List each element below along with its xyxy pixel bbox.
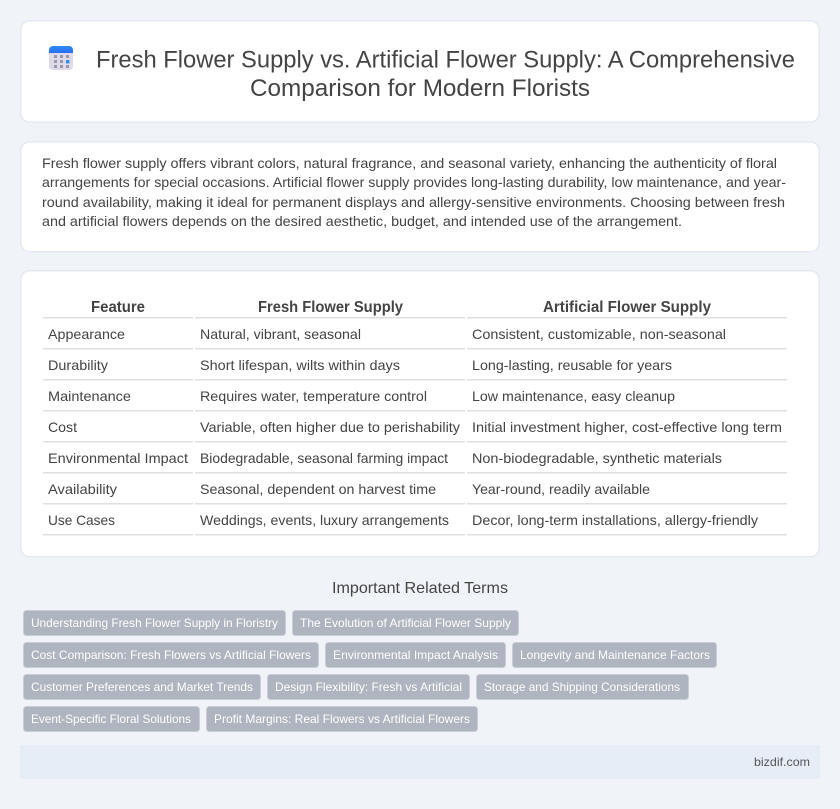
footer: bizdif.com: [754, 755, 810, 769]
heading: related terms: Important Related Terms: [332, 580, 508, 597]
tag: [24, 674, 260, 700]
table row: maintenance: Low maintenance, easy cleanup: [472, 388, 675, 404]
table row: durability: Short lifespan, wilts within days: [200, 357, 400, 373]
footer: [20, 745, 820, 779]
introduction text: [42, 155, 786, 229]
title text: Fresh Flower Supply vs. Artificial Flower Supply: A Comprehensive: [96, 46, 795, 74]
table row: appearance: [48, 326, 726, 342]
table row: maintenance: Requires water, temperature control: [200, 388, 427, 404]
table row: environmental impact: [48, 450, 722, 466]
introduction text: round availability, making it ideal for permanent displays and allergy-sensitive environments. Choosing between fresh: [42, 194, 785, 210]
table row: cost: Initial investment higher, cost-effective long term: [472, 419, 782, 435]
table row: availability: Seasonal, dependent on harvest time: [200, 481, 436, 497]
table row: durability: [48, 357, 672, 373]
tag: Design Flexibility: Fresh vs Artificial: [275, 680, 462, 694]
table row: durability: Durability: [48, 357, 108, 373]
related terms tags: [24, 610, 716, 732]
tag: [206, 706, 478, 732]
table row: availability: [48, 481, 650, 497]
table row: use cases: [48, 512, 758, 528]
panel: introduction: [21, 142, 819, 252]
table row: maintenance: [48, 388, 675, 404]
panel: title: [21, 21, 819, 122]
table row: availability: Availability: [48, 481, 117, 497]
table row: use cases: Decor, long-term installations, allergy-friendly: [472, 512, 758, 528]
tag: [326, 642, 506, 668]
tag: [476, 674, 688, 700]
table row: cost: [48, 419, 782, 435]
table row: maintenance: Maintenance: [48, 388, 131, 404]
tag: The Evolution of Artificial Flower Supply: [300, 616, 511, 630]
panel: comparison table: [21, 271, 819, 557]
tag: Cost Comparison: Fresh Flowers vs Artificial Flowers: [31, 648, 311, 662]
table header: Artificial Flower Supply: [543, 299, 711, 316]
tag: Customer Preferences and Market Trends: [31, 680, 253, 694]
tag: Storage and Shipping Considerations: [484, 680, 680, 694]
tag: [24, 610, 286, 636]
table row: environmental impact: Environmental Impact: [48, 450, 188, 466]
tag: Environmental Impact Analysis: [333, 648, 498, 662]
icon: calendar: [49, 46, 73, 70]
table row: appearance: Natural, vibrant, seasonal: [200, 326, 361, 342]
introduction text: Fresh flower supply offers vibrant colors, natural fragrance, and seasonal variety, enhancing the authenticity of floral: [42, 155, 777, 171]
title text: Comparison for Modern Florists: [250, 75, 590, 102]
tag: Longevity and Maintenance Factors: [520, 648, 710, 662]
table header: Fresh Flower Supply: [258, 299, 403, 316]
tag: [24, 706, 200, 732]
table row: environmental impact: Non-biodegradable, synthetic materials: [472, 450, 722, 466]
tag: Understanding Fresh Flower Supply in Floristry: [31, 616, 278, 630]
title text: [96, 46, 795, 102]
tag: [292, 610, 518, 636]
table header: [91, 299, 711, 316]
table row: cost: Cost: [48, 419, 77, 435]
table row: appearance: Consistent, customizable, non-seasonal: [472, 326, 726, 342]
table row: appearance: Appearance: [48, 326, 125, 342]
tag: Profit Margins: Real Flowers vs Artificial Flowers: [214, 712, 470, 726]
table row: availability: Year-round, readily available: [472, 481, 650, 497]
table row: use cases: Weddings, events, luxury arrangements: [200, 512, 449, 528]
tag: Event-Specific Floral Solutions: [31, 712, 191, 726]
tag: [268, 674, 470, 700]
tag: [512, 642, 716, 668]
tag: [24, 642, 318, 668]
table row: cost: Variable, often higher due to perishability: [200, 419, 460, 435]
table row: environmental impact: Biodegradable, seasonal farming impact: [200, 450, 448, 466]
table header: Feature: [91, 299, 145, 316]
table row: durability: Long-lasting, reusable for years: [472, 357, 672, 373]
introduction text: arrangements for special occasions. Artificial flower supply provides long-lasting durability, low maintenance, and year-: [42, 174, 786, 190]
introduction text: and artificial flowers depends on the desired aesthetic, budget, and intended use of the arrangement.: [42, 213, 682, 229]
table row: use cases: Use Cases: [48, 512, 115, 528]
